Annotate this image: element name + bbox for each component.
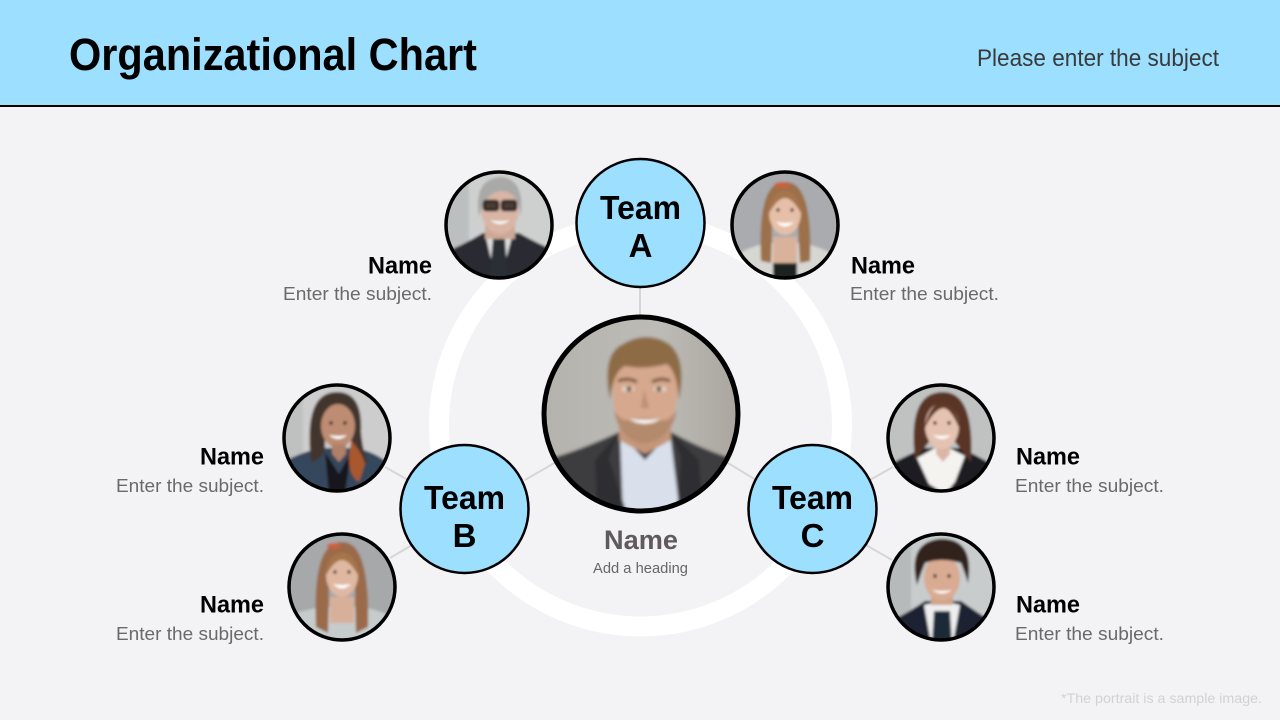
Team A node: Team — [600, 189, 681, 226]
white ring — [439, 224, 842, 626]
label: Team B lower member: Name — [200, 592, 264, 618]
portrait: older man, Team A left — [443, 169, 555, 281]
footnote: *The portrait is a sample image. — [1061, 690, 1262, 706]
label: Team B lower member: Enter the subject. — [116, 623, 264, 644]
connector lines — [385, 286, 893, 560]
Team C node — [748, 445, 876, 573]
header band — [0, 0, 1280, 107]
Team B node — [400, 445, 528, 573]
label: Team B upper member: Name — [200, 444, 264, 470]
central label: Name — [604, 525, 678, 555]
title: Organizational Chart — [69, 29, 477, 80]
label: Team B lower member — [116, 592, 264, 644]
label: Team C upper member: Name — [1016, 444, 1080, 470]
portrait: woman, Team C upper — [885, 382, 997, 494]
central label — [593, 525, 688, 577]
label: Team C lower member: Enter the subject. — [1015, 623, 1164, 644]
label: Team A left member — [283, 252, 432, 304]
label: Team A right member — [850, 252, 999, 304]
label: Team A left member: Name — [368, 252, 432, 280]
central label: Add a heading — [593, 560, 688, 577]
label: Team A left member: Enter the subject. — [283, 283, 432, 304]
label: Team C upper member — [1015, 444, 1164, 496]
Team B node: Team — [424, 479, 505, 516]
label: Team C upper member: Enter the subject. — [1015, 475, 1164, 496]
label: Team B upper member: Enter the subject. — [116, 475, 264, 496]
Team C node: Team — [772, 479, 853, 516]
subject text: Please enter the subject — [977, 45, 1219, 72]
portrait: central leader — [541, 314, 741, 514]
label: Team A right member: Name — [851, 252, 915, 280]
label: Team A right member: Enter the subject. — [850, 283, 999, 304]
Team C node: C — [801, 517, 824, 554]
Team B node: B — [453, 517, 476, 554]
Team A node — [576, 159, 704, 287]
label: Team B upper member — [116, 444, 264, 496]
portrait: woman, Team B upper — [281, 382, 393, 494]
label: Team C lower member — [1015, 592, 1164, 644]
Team A node: A — [629, 227, 652, 264]
label: Team C lower member: Name — [1016, 592, 1080, 618]
portrait: woman, Team B lower — [286, 531, 398, 643]
portrait: woman, Team A right — [729, 169, 841, 281]
portrait: man, Team C lower — [885, 531, 997, 643]
